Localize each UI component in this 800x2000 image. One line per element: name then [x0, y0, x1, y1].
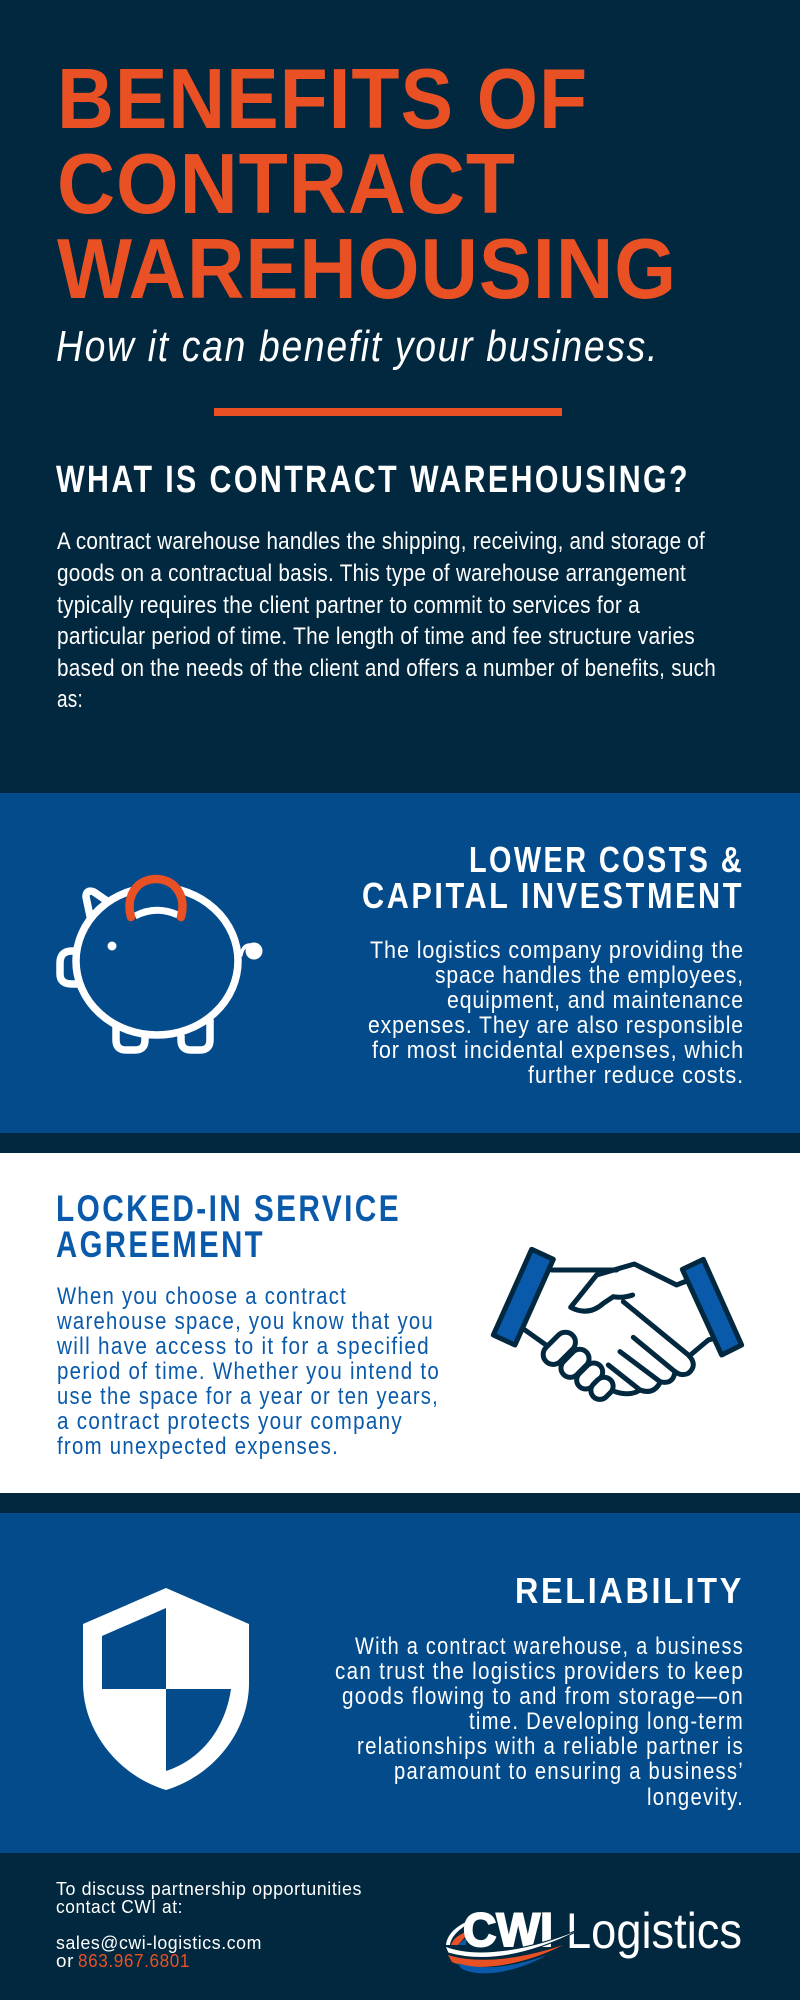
heading: lower costs	[362, 839, 744, 916]
text: locked-in service agreement: from unexpected expenses.	[57, 1433, 339, 1460]
text: lower costs: for most incidental expenses, which	[372, 1037, 744, 1064]
text: lower costs: expenses. They are also responsible	[368, 1012, 744, 1039]
text: reliability: can trust the logistics providers to keep	[335, 1658, 744, 1685]
text: reliability: relationships with a reliable partner is	[357, 1733, 744, 1760]
orange divider	[214, 408, 562, 416]
title: CONTRACT	[57, 137, 516, 232]
heading: lower costs: CAPITAL INVESTMENT	[362, 875, 744, 916]
panel: reliability	[0, 1513, 800, 1853]
logo: CWI Logistics: Logistics	[566, 1903, 742, 1959]
text: locked-in service agreement: When you choose a contract	[57, 1283, 347, 1310]
footer contact text: To discuss partnership opportunities	[56, 1879, 362, 1899]
intro text block: goods on a contractual basis. This type of warehouse arrangement	[57, 560, 686, 587]
footer contact text: or	[56, 1951, 74, 1971]
intro text block: based on the needs of the client and offers a number of benefits, such	[57, 655, 716, 682]
intro text block: A contract warehouse handles the shipping, receiving, and storage of	[57, 528, 705, 555]
intro text block: particular period of time. The length of time and fee structure varies	[57, 623, 695, 650]
icon: shield	[83, 1588, 249, 1790]
footer contact text	[56, 1879, 362, 1971]
text: reliability: goods flowing to and from storage—on	[342, 1683, 744, 1710]
intro text block: as:	[57, 686, 83, 713]
icon: piggy bank	[60, 879, 262, 1050]
text: reliability: paramount to ensuring a business’	[394, 1758, 744, 1785]
panel: lower costs	[0, 793, 800, 1133]
heading: locked-in service agreement	[56, 1188, 401, 1265]
text: reliability: time. Developing long-term	[469, 1708, 744, 1735]
footer contact text: sales@cwi-logistics.com	[56, 1933, 262, 1953]
heading: reliability: RELIABILITY	[515, 1570, 744, 1611]
intro text block	[57, 528, 716, 713]
text: lower costs	[368, 937, 744, 1089]
title: BENEFITS OF	[57, 52, 588, 147]
title: WAREHOUSING	[57, 222, 677, 317]
logo: CWI Logistics	[445, 1903, 742, 1973]
text: lower costs: equipment, and maintenance	[447, 987, 744, 1014]
text: lower costs: The logistics company providing the	[370, 937, 744, 964]
text: lower costs: further reduce costs.	[528, 1062, 744, 1089]
text: locked-in service agreement	[56, 1283, 440, 1460]
text: lower costs: space handles the employees,	[435, 962, 744, 989]
text: reliability	[335, 1633, 744, 1811]
text: locked-in service agreement: will have access to it for a specified	[56, 1333, 430, 1360]
text: locked-in service agreement: a contract protects your company	[57, 1408, 403, 1435]
logo: CWI Logistics: CWI	[463, 1903, 553, 1956]
footer contact text: contact CWI at:	[56, 1897, 183, 1917]
footer contact text: 863.967.6801	[78, 1951, 190, 1971]
panel: locked-in service agreement	[0, 1153, 800, 1493]
text: locked-in service agreement: period of time. Whether you intend to	[57, 1358, 440, 1385]
heading: locked-in service agreement: LOCKED-IN SERVICE	[56, 1188, 401, 1229]
title	[57, 52, 677, 317]
text: locked-in service agreement: use the space for a year or ten years,	[57, 1383, 439, 1410]
icon: handshake	[493, 1249, 742, 1403]
subtitle: How it can benefit your business.	[56, 322, 659, 371]
heading: locked-in service agreement: AGREEMENT	[56, 1224, 265, 1265]
text: reliability: longevity.	[647, 1784, 744, 1811]
text: locked-in service agreement: warehouse space, you know that you	[56, 1308, 434, 1335]
intro text block: typically requires the client partner to commit to services for a	[57, 592, 640, 619]
